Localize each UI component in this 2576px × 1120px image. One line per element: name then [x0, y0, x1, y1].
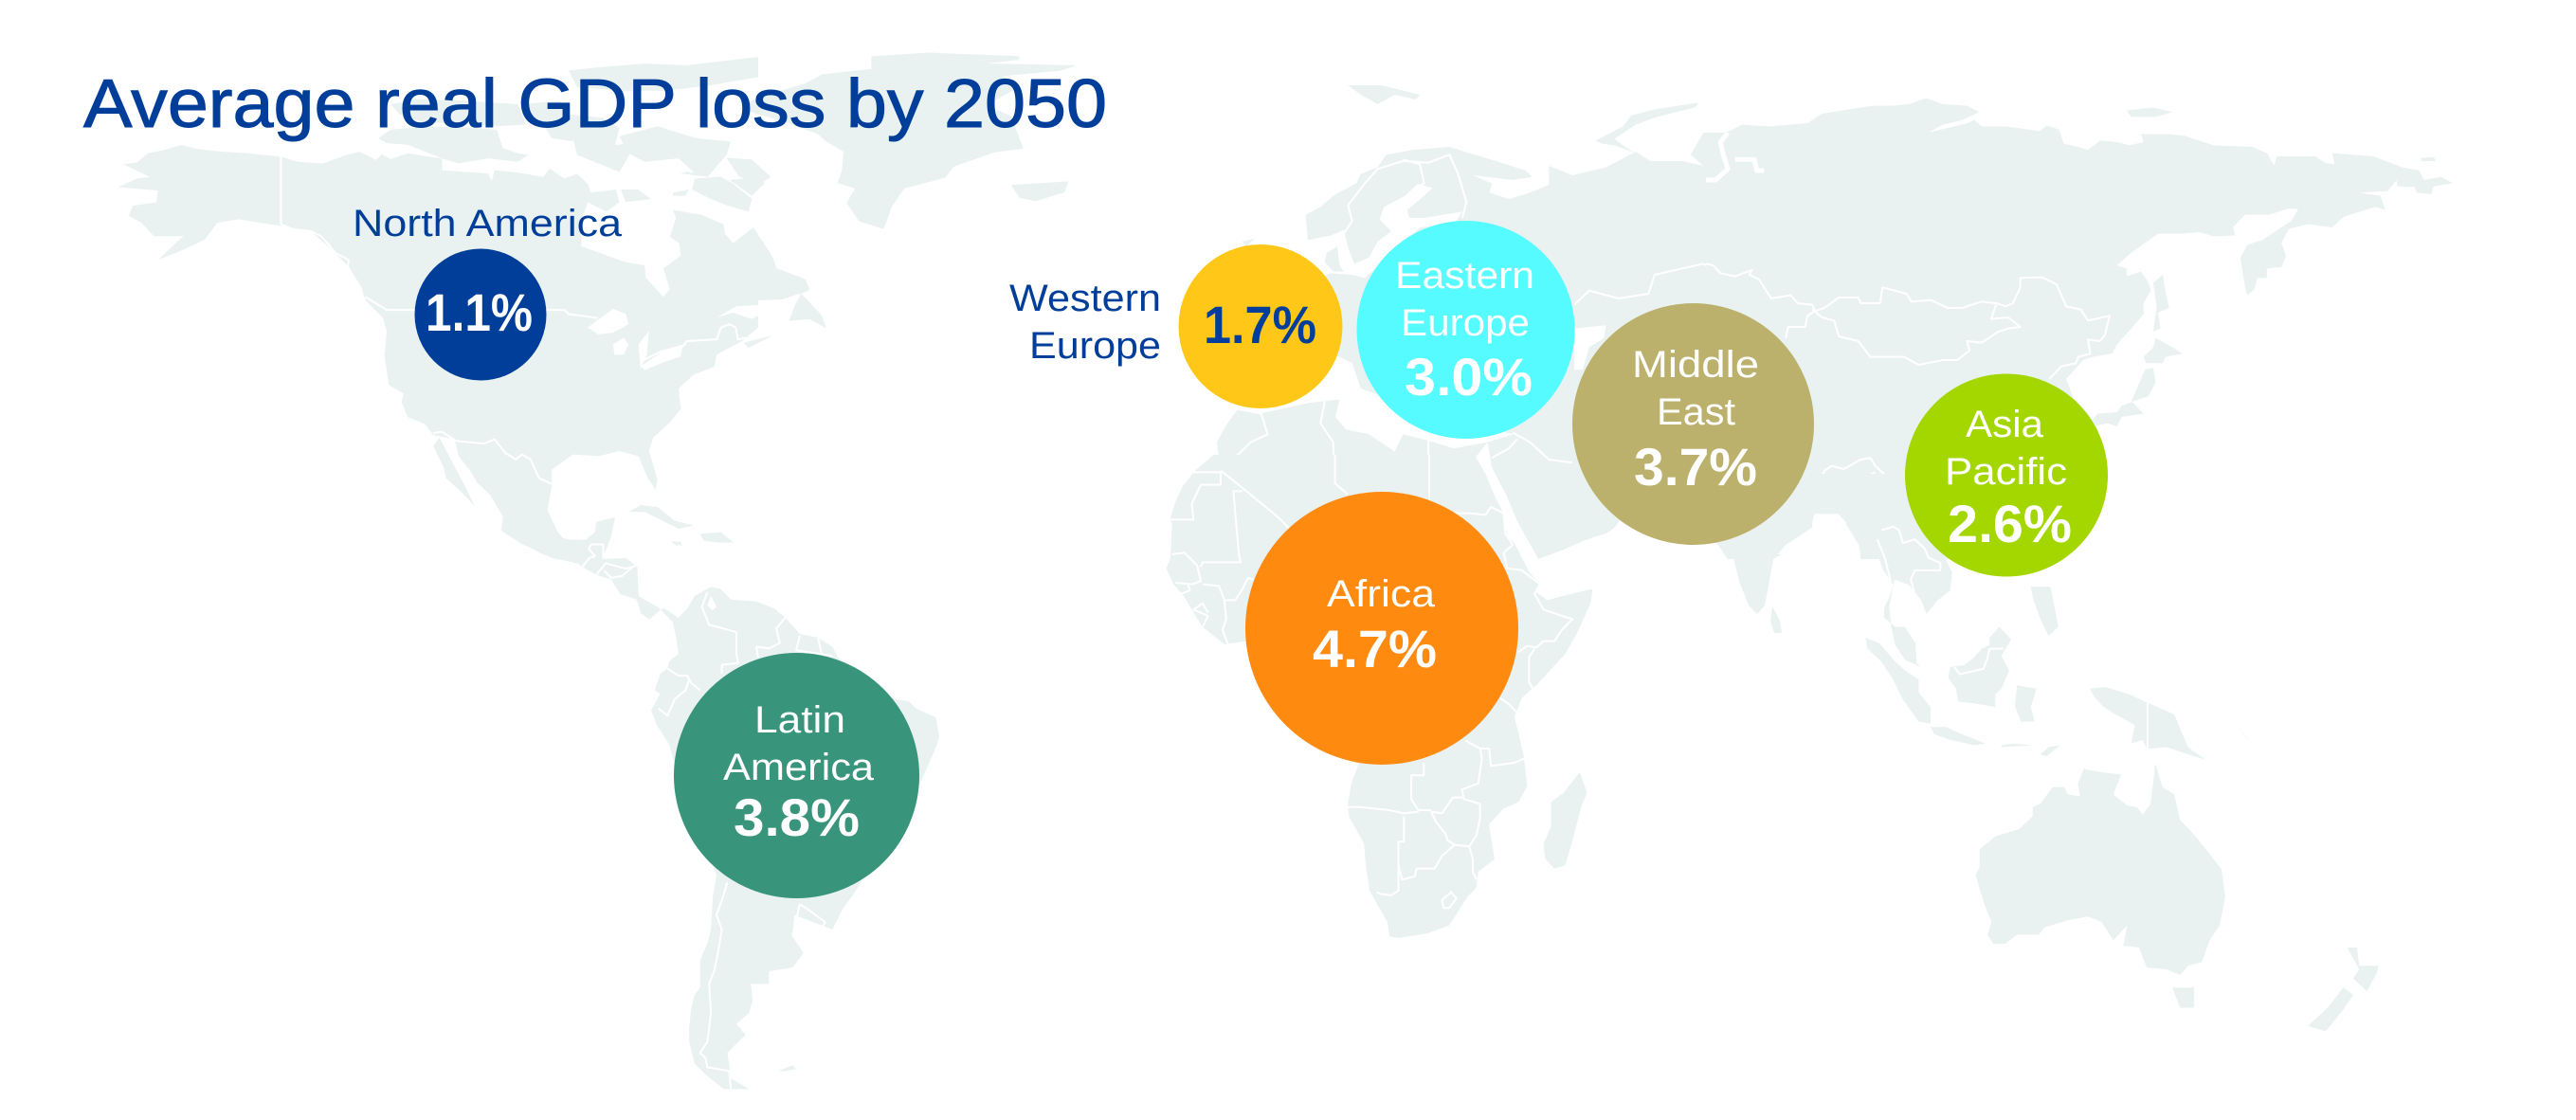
Middle East label: [1632, 344, 1759, 433]
map: Latin America: [502, 531, 939, 1089]
map: North American water and borders: [281, 156, 746, 484]
Africa circle: [1245, 492, 1518, 765]
title: Average real GDP loss by 2050: [83, 66, 1107, 142]
Eastern Europe circle: [1357, 221, 1575, 439]
Asia Pacific value: 2.6%: [1948, 494, 2072, 553]
North America circle: [415, 248, 546, 381]
map: East Asia: [1706, 98, 2453, 559]
Western Europe label: Western: [1009, 278, 1161, 319]
Middle East value: 3.7%: [1634, 437, 1757, 497]
Western Europe label: Europe: [1029, 325, 1161, 367]
Latin America label: America: [723, 747, 875, 788]
Eastern Europe value: 3.0%: [1405, 347, 1533, 406]
bubble: Middle East: [1572, 303, 1814, 545]
bubble: Latin America: [674, 653, 919, 898]
Latin America label: [723, 699, 875, 788]
bubble: Asia Pacific: [1905, 373, 2108, 576]
Western Europe label: [1009, 278, 1161, 367]
Asia Pacific label: Pacific: [1945, 451, 2067, 493]
Eastern Europe label: Europe: [1401, 302, 1530, 344]
bubble: North America: [353, 203, 623, 381]
Latin America value: 3.8%: [734, 787, 860, 847]
Latin America label: Latin: [754, 699, 845, 741]
map: Europe and western Asia: [1243, 85, 1753, 559]
map: India and Sri Lanka: [1732, 554, 1782, 633]
North America label: North America: [353, 203, 623, 244]
Africa label: Africa: [1327, 573, 1436, 615]
Asia Pacific label: [1945, 404, 2067, 493]
Western Europe value: 1.7%: [1204, 295, 1316, 354]
map: Africa: [1167, 400, 1592, 938]
Africa value: 4.7%: [1313, 619, 1437, 678]
map: Hudson Bay, Baffin Bay and Canadian islands: [581, 133, 853, 319]
Middle East label: Middle: [1632, 344, 1759, 386]
bubble: Eastern Europe: [1357, 221, 1575, 439]
map: Canada east and Greenland: [649, 52, 1077, 348]
map: North America: [118, 57, 758, 565]
Middle East label: East: [1657, 391, 1735, 433]
Eastern Europe label: [1395, 255, 1534, 344]
Asia Pacific label: Asia: [1966, 404, 2044, 445]
map: Southeast Asia and Oceania: [1801, 474, 2379, 1031]
bubble: Western Europe: [1009, 244, 1342, 408]
Western Europe circle: [1179, 244, 1342, 408]
Latin America circle: [674, 653, 919, 898]
bubble: Africa: [1245, 492, 1518, 765]
Middle East circle: [1572, 303, 1814, 545]
North America value: 1.1%: [426, 282, 533, 342]
Asia Pacific circle: [1905, 373, 2108, 576]
Eastern Europe label: Eastern: [1395, 255, 1534, 297]
